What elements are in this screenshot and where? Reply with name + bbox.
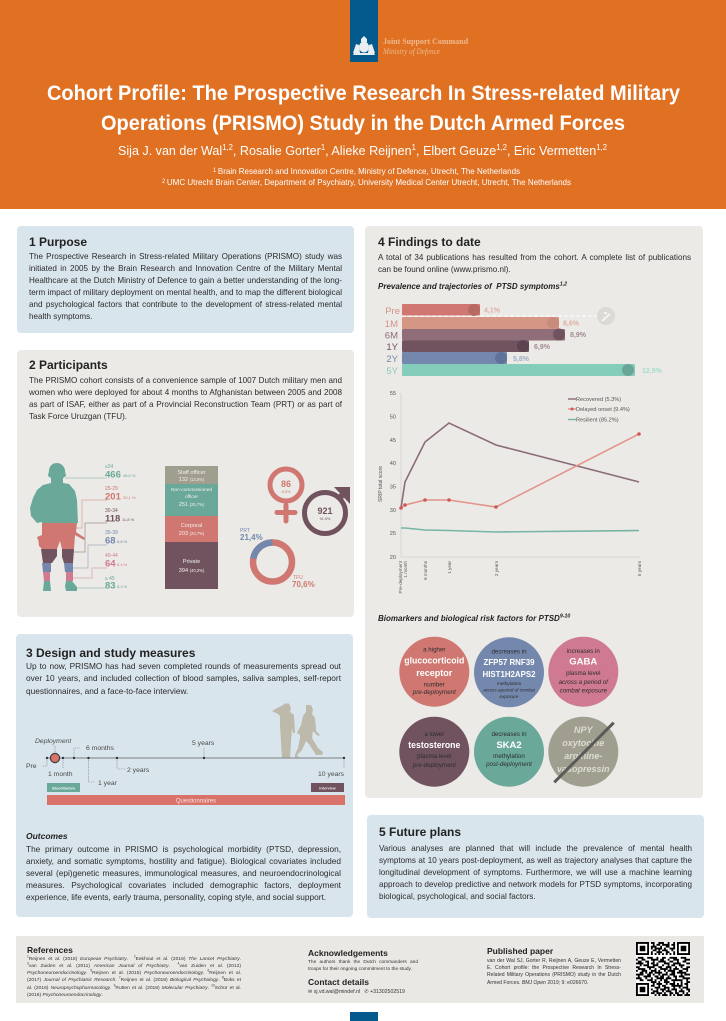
circle: ZFP57 RNF39 HIST1H2APS2: HIST1H2APS2 [482,669,536,679]
circle: GABA: across a period of [559,679,609,686]
text: purpose [29,252,342,321]
outcomes text [26,844,341,902]
circle: ZFP57 RNF39 HIST1H2APS2: across aperiod of combat [483,688,536,692]
outcomes text: several (epi)genetic measures, immunological measures, and neuroendocrinological [26,868,341,878]
circle: ZFP57 RNF39 HIST1H2APS2: methylation [497,681,522,687]
text: participants: women who were deployed for about 4 months to Afghanistan between 2005 and 2008 [29,388,342,397]
chart: timeline: 1 year [98,780,118,787]
circle: NPY oxytocine arginine-vasopressin: NPY [574,725,594,735]
authors and affiliations: , Rosalie Gorter [233,143,321,158]
circle: testosterone: a lower [424,731,444,738]
chart: PTSD prevalence bars: Pre [385,306,400,317]
header banner [0,0,726,209]
panel: participants [17,350,354,617]
chart: rank stacked bar: Private [183,559,200,565]
bottom blue tab [350,1012,378,1021]
title: Operations (PRISMO) Study in the Dutch Armed Forces [101,112,625,135]
chart: age distribution soldier: 25-29 [105,486,118,492]
text: participants [29,376,342,421]
chart: SRIP trajectory line chart: 30 [390,508,396,514]
chart: SRIP trajectory line chart: 2 years [494,560,499,576]
chart: PTSD prevalence bars [385,304,663,377]
text: participants: The PRISMO cohort consists of a convenience sample of 1007 Dutch military men and [29,376,342,385]
chart: gender symbols [268,466,350,536]
authors and affiliations: 1,2 [596,143,608,152]
chart: gender symbols: 91,5% [320,517,331,521]
references: al. (2016) Neuropsychopharmacology. 9 Rutten et al. (2018) Molecular Psychiatry. 10 Schür et al. [27,983,241,991]
text: design: over 10 years, and included collection of blood samples, saliva samples, self-report [26,673,341,683]
panel: findings to date [365,226,703,798]
chart: SRIP trajectory line chart: SRIP total score [378,466,384,502]
text: design [26,661,341,696]
acknowledgements [308,948,418,972]
circle: SKA2: SKA2 [496,740,522,751]
chart: deployment donut: 21,4% [240,533,263,542]
circle: ZFP57 RNF39 HIST1H2APS2: exposure [500,694,519,699]
chart: biomarker circles [399,636,618,787]
title: Cohort Profile: The Prospective Research In Stress-related Military [47,82,680,105]
authors and affiliations: UMC Utrecht Brain Center, Department of Psychiatry, University Medical Center Utrecht, Utrecht, The Netherlands [167,178,571,187]
outcomes text: The primary outcome in PRISMO is psychological morbidity (PTSD, depression, [26,844,341,854]
panel: purpose [17,226,354,333]
references: 3 van Zuiden et al. (2011) American Journal of Psychiatry. 4 van Zuiden et al. (2012) [27,961,241,969]
title [47,82,680,135]
circle: testosterone [399,717,469,787]
logo [350,0,468,62]
text: future plans: approach to develop predictive and network models for PTSD symptoms, incorporating [379,880,692,889]
text: design: Up to now, PRISMO has had seven completed rounds of measurements spread out [26,661,341,671]
references: (2016) Psychoneuroendocrinology. [27,993,103,998]
panel: future plans [367,815,704,918]
chart: SRIP trajectory line chart: 35 [390,484,396,490]
chart: timeline: Pre [26,763,37,770]
subheading: biomarkers: Biomarkers and biological risk factors for PTSD9-10 [378,613,570,623]
chart: rank stacked bar: officer [185,494,198,500]
chart: age distribution soldier: 40-44 [105,553,118,559]
chart: PTSD prevalence bars: 8,6% [563,320,580,328]
authors and affiliations: Sija J. van der Wal [118,143,226,158]
published paper: Related Military Operations (PRISMO) study in the Dutch [487,972,621,978]
circle: SKA2: post-deployment [485,761,532,768]
authors and affiliations: , Alieke Reijnen [325,143,412,158]
chart: PTSD prevalence bars: 5Y [386,366,399,377]
chart: timeline: Deployment [35,738,72,745]
chart: rank stacked bar: Non-commissioned [171,487,212,493]
authors and affiliations: 1,2 [496,143,507,152]
circle: SKA2: methylation [493,753,525,760]
chart: SRIP trajectory line chart: 40 [390,461,396,467]
published paper: Published paper [487,946,553,956]
circle: ZFP57 RNF39 HIST1H2APS2: decreases in [491,648,527,656]
circle: GABA: combat exposure [560,688,608,694]
chart: rank stacked bar [165,466,218,589]
chart: age distribution soldier: 35-39 [105,530,118,536]
chart: age distribution soldier: 6,4 % [117,562,128,567]
circle: glucocorticoid receptor: number [424,682,445,688]
text: purpose: health symptoms. [29,312,92,321]
published paper: Armed Forces. BMJ Open 2019; 9: e026670. [487,980,588,986]
chart: age distribution soldier: ≤24 [105,464,114,470]
contact details: ✉ sj.vd.wal@mindef.nl ✆ +31302502519 [308,988,405,994]
references: Psychoneuroendocrinology. 5 Reijnen et al. (2015) Psychoneuroendocrinology. 6 Reijnen et al. [27,968,241,976]
outcomes heading: Outcomes [26,831,68,841]
QR code [636,942,690,996]
chart: age distribution soldier: 466 [105,470,121,480]
references: (2017) Journal of Psychiatric Research. 7 Reijnen et al. (2018) Biological Psychology. 8 Boks et [27,976,241,983]
chart: age distribution soldier: 6,8 % [117,539,128,544]
outcomes text: experience, life events, early trauma, personality, coping style, and social support. [26,892,326,902]
chart: timeline: 1 month [48,771,73,778]
logo: Ministry of Defence [382,47,440,56]
chart: timeline: Interview [319,786,336,790]
chart: timeline: 10 years [318,771,345,778]
text: future plans: biological, psychological, and social factors. [379,892,536,901]
circle: NPY oxytocine arginine-vasopressin: oxytocine [562,738,604,748]
chart: SRIP trajectory line chart: 45 [390,438,396,444]
acknowledgements: The authors thank the Dutch commanders and [308,960,418,964]
text: future plans: longitudinal development of symptoms. Furthermore, we will use a machine learning [379,868,692,877]
chart: PTSD prevalence bars: 8,9% [570,332,587,339]
circle: SKA2: decreases in [491,731,527,738]
chart: deployment donut: PRT [240,528,250,534]
authors and affiliations: 1 [412,143,417,152]
acknowledgements: Acknowledgements [308,948,388,958]
chart: PTSD prevalence bars: 5,8% [513,356,530,363]
circle: glucocorticoid receptor: a higher [423,646,445,654]
circle: NPY oxytocine arginine-vasopressin: vasopressin [557,764,610,774]
chart: timeline: Questionnaires [176,798,216,804]
circle: glucocorticoid receptor: glucocorticoid [404,656,464,666]
circle: glucocorticoid receptor: pre-deployment [412,689,456,696]
authors and affiliations: 1 [321,143,326,152]
chart: rank stacked bar: 394 (40,2%) [179,568,205,574]
chart: SRIP trajectory line chart [378,391,642,594]
outcomes text: measures. Psychological covariates included demographic factors, deployment [26,880,341,890]
text: future plans [379,844,692,901]
contact details [308,977,405,994]
heading: future plans: 5 Future plans [379,825,461,839]
chart: PTSD prevalence bars: 4,1% [484,308,501,314]
authors and affiliations: 1,2 [222,143,233,152]
chart: gender symbols: 8,5% [282,490,291,494]
chart: deployment donut: 70,6% [292,580,315,589]
acknowledgements: troops for their ongoing commitment to the study. [308,967,412,972]
authors and affiliations: 2 [162,179,167,185]
chart: gender symbols: 921 [317,506,333,516]
circle: ZFP57 RNF39 HIST1H2APS2 [474,637,544,707]
circle: glucocorticoid receptor [399,637,469,707]
published paper: E. Cohort profile: the Prospective Research In Stress- [487,965,621,971]
text: purpose: Healthcare at the Dutch Ministry of Defence to gain a better understanding of the long- [29,276,342,285]
circle: SKA2 [474,717,544,787]
chart: age distribution soldier: 201 [105,492,122,502]
icon: soldier silhouettes [272,704,323,758]
chart: rank stacked bar: Staff officer [177,470,206,476]
text: future plans: symptoms at 10 years post-deployment, as well as trajectory analyses that capture the [379,856,692,865]
outcomes text: anxiety, and somatic symptoms, hostility and fatigue). Biological covariates included [26,856,341,866]
contact details: Contact details [308,977,369,987]
chart: rank stacked bar: 132 (13,5%) [179,477,205,483]
published paper [487,946,621,986]
chart: age distribution soldier: 118 [105,514,120,524]
authors and affiliations: , Eric Vermetten [507,143,596,158]
circle: GABA: GABA [569,656,597,668]
circle: glucocorticoid receptor: receptor [416,668,453,678]
chart: age distribution soldier: 83 [105,580,116,592]
text: findings: A total of 34 publications has resulted from the cohort. A complete list of publications [378,253,691,262]
text: purpose: initiated in 2005 by the Brain Research and Innovation Centre of the Military Mental [29,264,342,273]
chart: age distribution soldier: 46,6 % [123,473,136,478]
chart: timeline: 6 months [86,745,115,752]
text: findings: can be found online (www.prismo.nl). [378,265,511,274]
chart: timeline [26,704,346,805]
authors and affiliations [118,143,608,187]
text: findings [378,253,691,274]
chart: SRIP trajectory line chart: 6 months [423,560,428,580]
chart: SRIP trajectory line chart: 55 [390,391,396,397]
published paper: van der Wal SJ, Gorter R, Reijnen A, Geuze E, Vermetten [487,958,621,964]
chart: age distribution soldier: 64 [105,558,116,570]
chart: SRIP trajectory line chart: Resilient (85.2%) [576,418,619,424]
references: 1 Reijnen et al. (2015) European Psychiatry. 2 Eekhout et al. (2016) The Lancet Psychiatry. [27,954,241,962]
authors and affiliations: Brain Research and Innovation Centre, Ministry of Defence, Utrecht, The Netherlands [218,167,520,176]
chart: SRIP trajectory line chart: Recovered (5.3%) [576,397,621,403]
chart: SRIP trajectory line chart: 25 [390,531,396,537]
subheading: prevalence: Prevalence and trajectories of PTSD symptoms1,2 [378,281,567,291]
chart: SRIP trajectory line chart: 1 month [403,561,408,578]
circle: NPY oxytocine arginine-vasopressin [548,717,618,787]
heading: participants: 2 Participants [29,358,108,372]
heading: findings: 4 Findings to date [378,235,481,249]
circle: GABA: plasma level [566,670,601,677]
chart: deployment donut [240,528,315,589]
chart: age distribution soldier: 30-34 [105,508,118,514]
text: purpose: The Prospective Research in Stress-related Military Operations (PRISMO) study was [29,252,342,261]
chart: PTSD prevalence bars: 6M [385,330,398,342]
panel: design and study measures [16,634,353,917]
authors and affiliations: , Elbert Geuze [416,143,496,158]
chart: PTSD prevalence bars: 1M [385,319,398,330]
chart: SRIP trajectory line chart: 20 [390,555,396,561]
chart: age distribution soldier: 8,3 % [117,584,128,589]
heading: design: 3 Design and study measures [26,646,195,660]
chart: age distribution soldier: 11,8 % [122,517,135,522]
references: References [27,945,73,955]
chart: timeline: Blood/Saliva [52,786,76,790]
chart: rank stacked bar: Corporal [181,523,202,529]
chart: PTSD prevalence bars: 12,9% [642,368,663,375]
chart: rank stacked bar: 203 (20,7%) [179,531,205,537]
text: participants: Task Force Uruzgan (TFU). [29,412,127,421]
chart: age distribution soldier: 68 [105,536,116,546]
text: future plans: Various analyses are planned that will include the prevalence of mental health [379,844,692,853]
chart: PTSD prevalence bars: 1Y [386,342,399,353]
circle: GABA: increases in [567,648,600,655]
chart: gender symbols: 86 [281,479,291,489]
circle: testosterone: pre-deployment [412,762,456,769]
text: design: questionnaires, and a face-to-face interview. [26,686,188,696]
chart: SRIP trajectory line chart: Pre-deployment [398,560,403,593]
chart: age distribution soldier: ≥ 45 [105,576,115,582]
circle: NPY oxytocine arginine-vasopressin: arginine- [564,751,602,761]
chart: timeline: 2 years [127,767,150,774]
circle: testosterone: testosterone [408,740,460,750]
chart: deployment donut: TFU [293,575,303,581]
chart: PTSD prevalence bars: 2Y [386,354,399,365]
references [27,945,241,998]
heading: purpose: 1 Purpose [29,235,87,249]
text: purpose: and psychological factors that contribute to the development of stress-related mental [29,300,342,309]
chart: SRIP trajectory line chart: 1 year [447,561,452,574]
circle: testosterone: plasma level [417,753,452,760]
chart: age distribution soldier: 20,1 % [123,495,136,500]
chart: rank stacked bar: 251 (25,7%) [179,502,205,508]
chart: SRIP trajectory line chart: 5 years [637,560,642,576]
text: purpose: term impact of military deployment on mental health, and to map the different biological [29,288,342,297]
footer panel [16,936,704,1003]
chart: timeline: 5 years [192,740,215,747]
authors and affiliations: 1 [213,168,218,174]
chart: PTSD prevalence bars: 6,9% [534,344,551,351]
logo: Joint Support Command [383,37,468,46]
chart: SRIP trajectory line chart: 50 [390,414,396,420]
chart: age distribution soldier [30,463,136,592]
chart: SRIP trajectory line chart: Delayed onset (9.4%) [576,407,630,413]
circle: ZFP57 RNF39 HIST1H2APS2: ZFP57 RNF39 [484,657,535,667]
circle: GABA [548,637,618,707]
text: participants: as part of ISAF, either as part of a Provincial Reconstruction Team (PRT) or as part of [29,400,342,409]
